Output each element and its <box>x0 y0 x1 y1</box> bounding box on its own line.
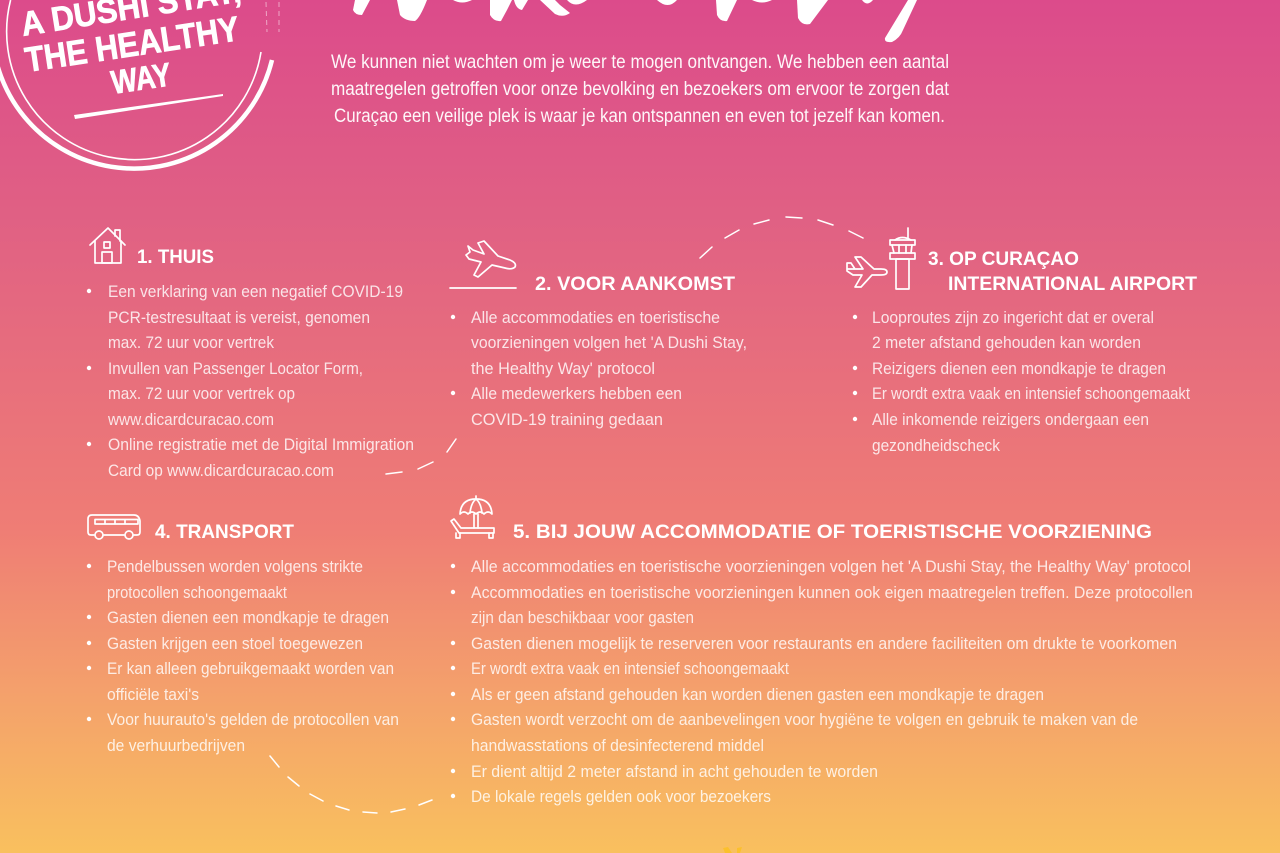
dashed arc: section 4 to 5 <box>270 756 432 813</box>
icon: plane and control tower <box>847 228 915 289</box>
bullet list: Thuis: www.dicardcuracao.com <box>107 410 274 429</box>
bullet list: Accommodatie: handwasstations of desinfecterend middel <box>471 736 764 755</box>
bullet list: Accommodatie: Gasten wordt verzocht om de aanbevelingen voor hygiëne te volgen en gebruik te maken van de <box>471 710 1138 729</box>
stamp inner ring <box>7 0 261 160</box>
bullet list: Thuis: PCR-testresultaat is vereist, genomen <box>108 308 370 327</box>
panel: 2. Voor aankomst <box>450 241 747 429</box>
intro text <box>331 52 950 127</box>
bullet list: Accommodatie: Als er geen afstand gehouden kan worden dienen gasten een mondkapje te dragen <box>471 685 1044 704</box>
bullet list: Accommodatie: Er dient altijd 2 meter afstand in acht gehouden te worden <box>471 762 878 781</box>
icon: beach chair and umbrella <box>451 496 494 538</box>
bullet list: Accommodatie: Alle accommodaties en toeristische voorzieningen volgen het 'A Dushi Stay, the Healthy Way' protocol <box>471 557 1191 576</box>
bullet list: Voor aankomst: Alle accommodaties en toeristische <box>471 308 720 327</box>
bullet list: Accommodatie: De lokale regels gelden ook voor bezoekers <box>471 787 771 806</box>
bullet list: Op Curaçao: 2 meter afstand gehouden kan worden <box>872 333 1141 352</box>
panel: 5. Bij jouw accommodatie of toeristische voorziening <box>451 496 1193 806</box>
stamp: A Dushi Stay, the Healthy Way <box>0 0 279 169</box>
heading: 2. Voor aankomst: 2. VOOR AANKOMST <box>535 273 735 295</box>
bullet list: Op Curaçao: Alle inkomende reizigers ondergaan een <box>872 410 1149 429</box>
bullet list: Transport: Voor huurauto's gelden de protocollen van <box>107 710 399 729</box>
intro text: We kunnen niet wachten om je weer te mogen ontvangen. We hebben een aantal <box>331 52 949 73</box>
bullet list: Transport <box>87 557 399 755</box>
dashed arc: section 1 to 2 <box>386 439 456 474</box>
bullet list: Voor aankomst: the Healthy Way' protocol <box>471 359 655 378</box>
bullet list: Thuis: Online registratie met de Digital Immigration <box>108 435 414 454</box>
stamp text: THE HEALTHY <box>22 9 242 80</box>
heading: 3. Op Curaçao International Airport <box>928 248 1197 295</box>
heading: 3. Op Curaçao International Airport: INTERNATIONAL AIRPORT <box>948 273 1197 295</box>
yellow mark at bottom edge <box>723 847 742 853</box>
bullet list: Thuis: max. 72 uur voor vertrek <box>108 333 274 352</box>
bullet list: Thuis <box>87 282 414 480</box>
bullet list: Voor aankomst: COVID-19 training gedaan <box>471 410 663 429</box>
bullet list: Accommodatie <box>451 557 1193 806</box>
bullet list: Transport: protocollen schoongemaakt <box>107 583 287 602</box>
icon: house <box>90 228 125 263</box>
bullet list: Accommodatie: Accommodaties en toeristische voorzieningen kunnen ook eigen maatregelen treffen. Deze protocollen <box>471 583 1193 602</box>
bullet list: Voor aankomst: Alle medewerkers hebben een <box>471 384 682 403</box>
bullet list: Op Curaçao: Er wordt extra vaak en intensief schoongemaakt <box>872 384 1190 403</box>
intro text: maatregelen getroffen voor onze bevolking en bezoekers om ervoor te zorgen dat <box>331 79 950 100</box>
heading: 4. Transport: 4. TRANSPORT <box>155 521 294 543</box>
bullet list: Op Curaçao: Reizigers dienen een mondkapje te dragen <box>872 359 1166 378</box>
bullet list: Transport: officiële taxi's <box>107 685 199 704</box>
stamp broken ring marks <box>266 2 279 32</box>
panel: 4. Transport <box>87 515 399 755</box>
bullet list: Transport: Pendelbussen worden volgens strikte <box>107 557 363 576</box>
bullet list: Accommodatie: Gasten dienen mogelijk te reserveren voor restaurants en andere faciliteiten om drukte te voorkomen <box>471 634 1177 653</box>
dashed arc: section 2 to 3 <box>700 217 863 258</box>
bullet list: Thuis: max. 72 uur voor vertrek op <box>108 384 295 403</box>
bullet list: Voor aankomst: voorzieningen volgen het 'A Dushi Stay, <box>471 333 747 352</box>
bullet list: Op Curaçao <box>853 308 1190 455</box>
icon: bus <box>88 515 140 539</box>
heading: 3. Op Curaçao International Airport: 3. OP CURAÇAO <box>928 248 1079 270</box>
stamp outer ring <box>0 28 272 169</box>
bullet list: Thuis: Invullen van Passenger Locator Form, <box>108 359 363 378</box>
stamp underline <box>74 94 223 119</box>
stamp text: WAY <box>109 55 173 101</box>
bullet list: Thuis: Een verklaring van een negatief COVID-19 <box>108 282 403 301</box>
bullet list: Voor aankomst <box>451 308 747 429</box>
heading: 1. Thuis: 1. THUIS <box>137 246 214 268</box>
bullet list: Op Curaçao: gezondheidscheck <box>872 436 1000 455</box>
bullet list: Transport: Gasten dienen een mondkapje te dragen <box>107 608 389 627</box>
panel: 1. Thuis <box>87 228 414 480</box>
intro text: Curaçao een veilige plek is waar je kan ontspannen en even tot jezelf kan komen. <box>334 106 945 127</box>
bullet list: Transport: Er kan alleen gebruikgemaakt worden van <box>107 659 394 678</box>
heading: 5. Bij jouw accommodatie of toeristische voorziening: 5. BIJ JOUW ACCOMMODATIE OF TOERISTISCHE VOORZIENING <box>513 521 1152 543</box>
bullet list: Accommodatie: Er wordt extra vaak en intensief schoongemaakt <box>471 659 789 678</box>
bullet list: Thuis: Card op www.dicardcuracao.com <box>108 461 334 480</box>
icon: landing plane <box>450 241 516 288</box>
bullet list: Transport: Gasten krijgen een stoel toegewezen <box>107 634 363 653</box>
bullet list: Transport: de verhuurbedrijven <box>107 736 245 755</box>
bullet list: Accommodatie: zijn dan beschikbaar voor gasten <box>471 608 694 627</box>
bullet list: Op Curaçao: Looproutes zijn zo ingericht dat er overal <box>872 308 1154 327</box>
panel: 3. Op Curaçao International Airport <box>847 228 1197 455</box>
stamp text <box>18 0 244 101</box>
title: cropped brush lettering <box>353 0 917 42</box>
